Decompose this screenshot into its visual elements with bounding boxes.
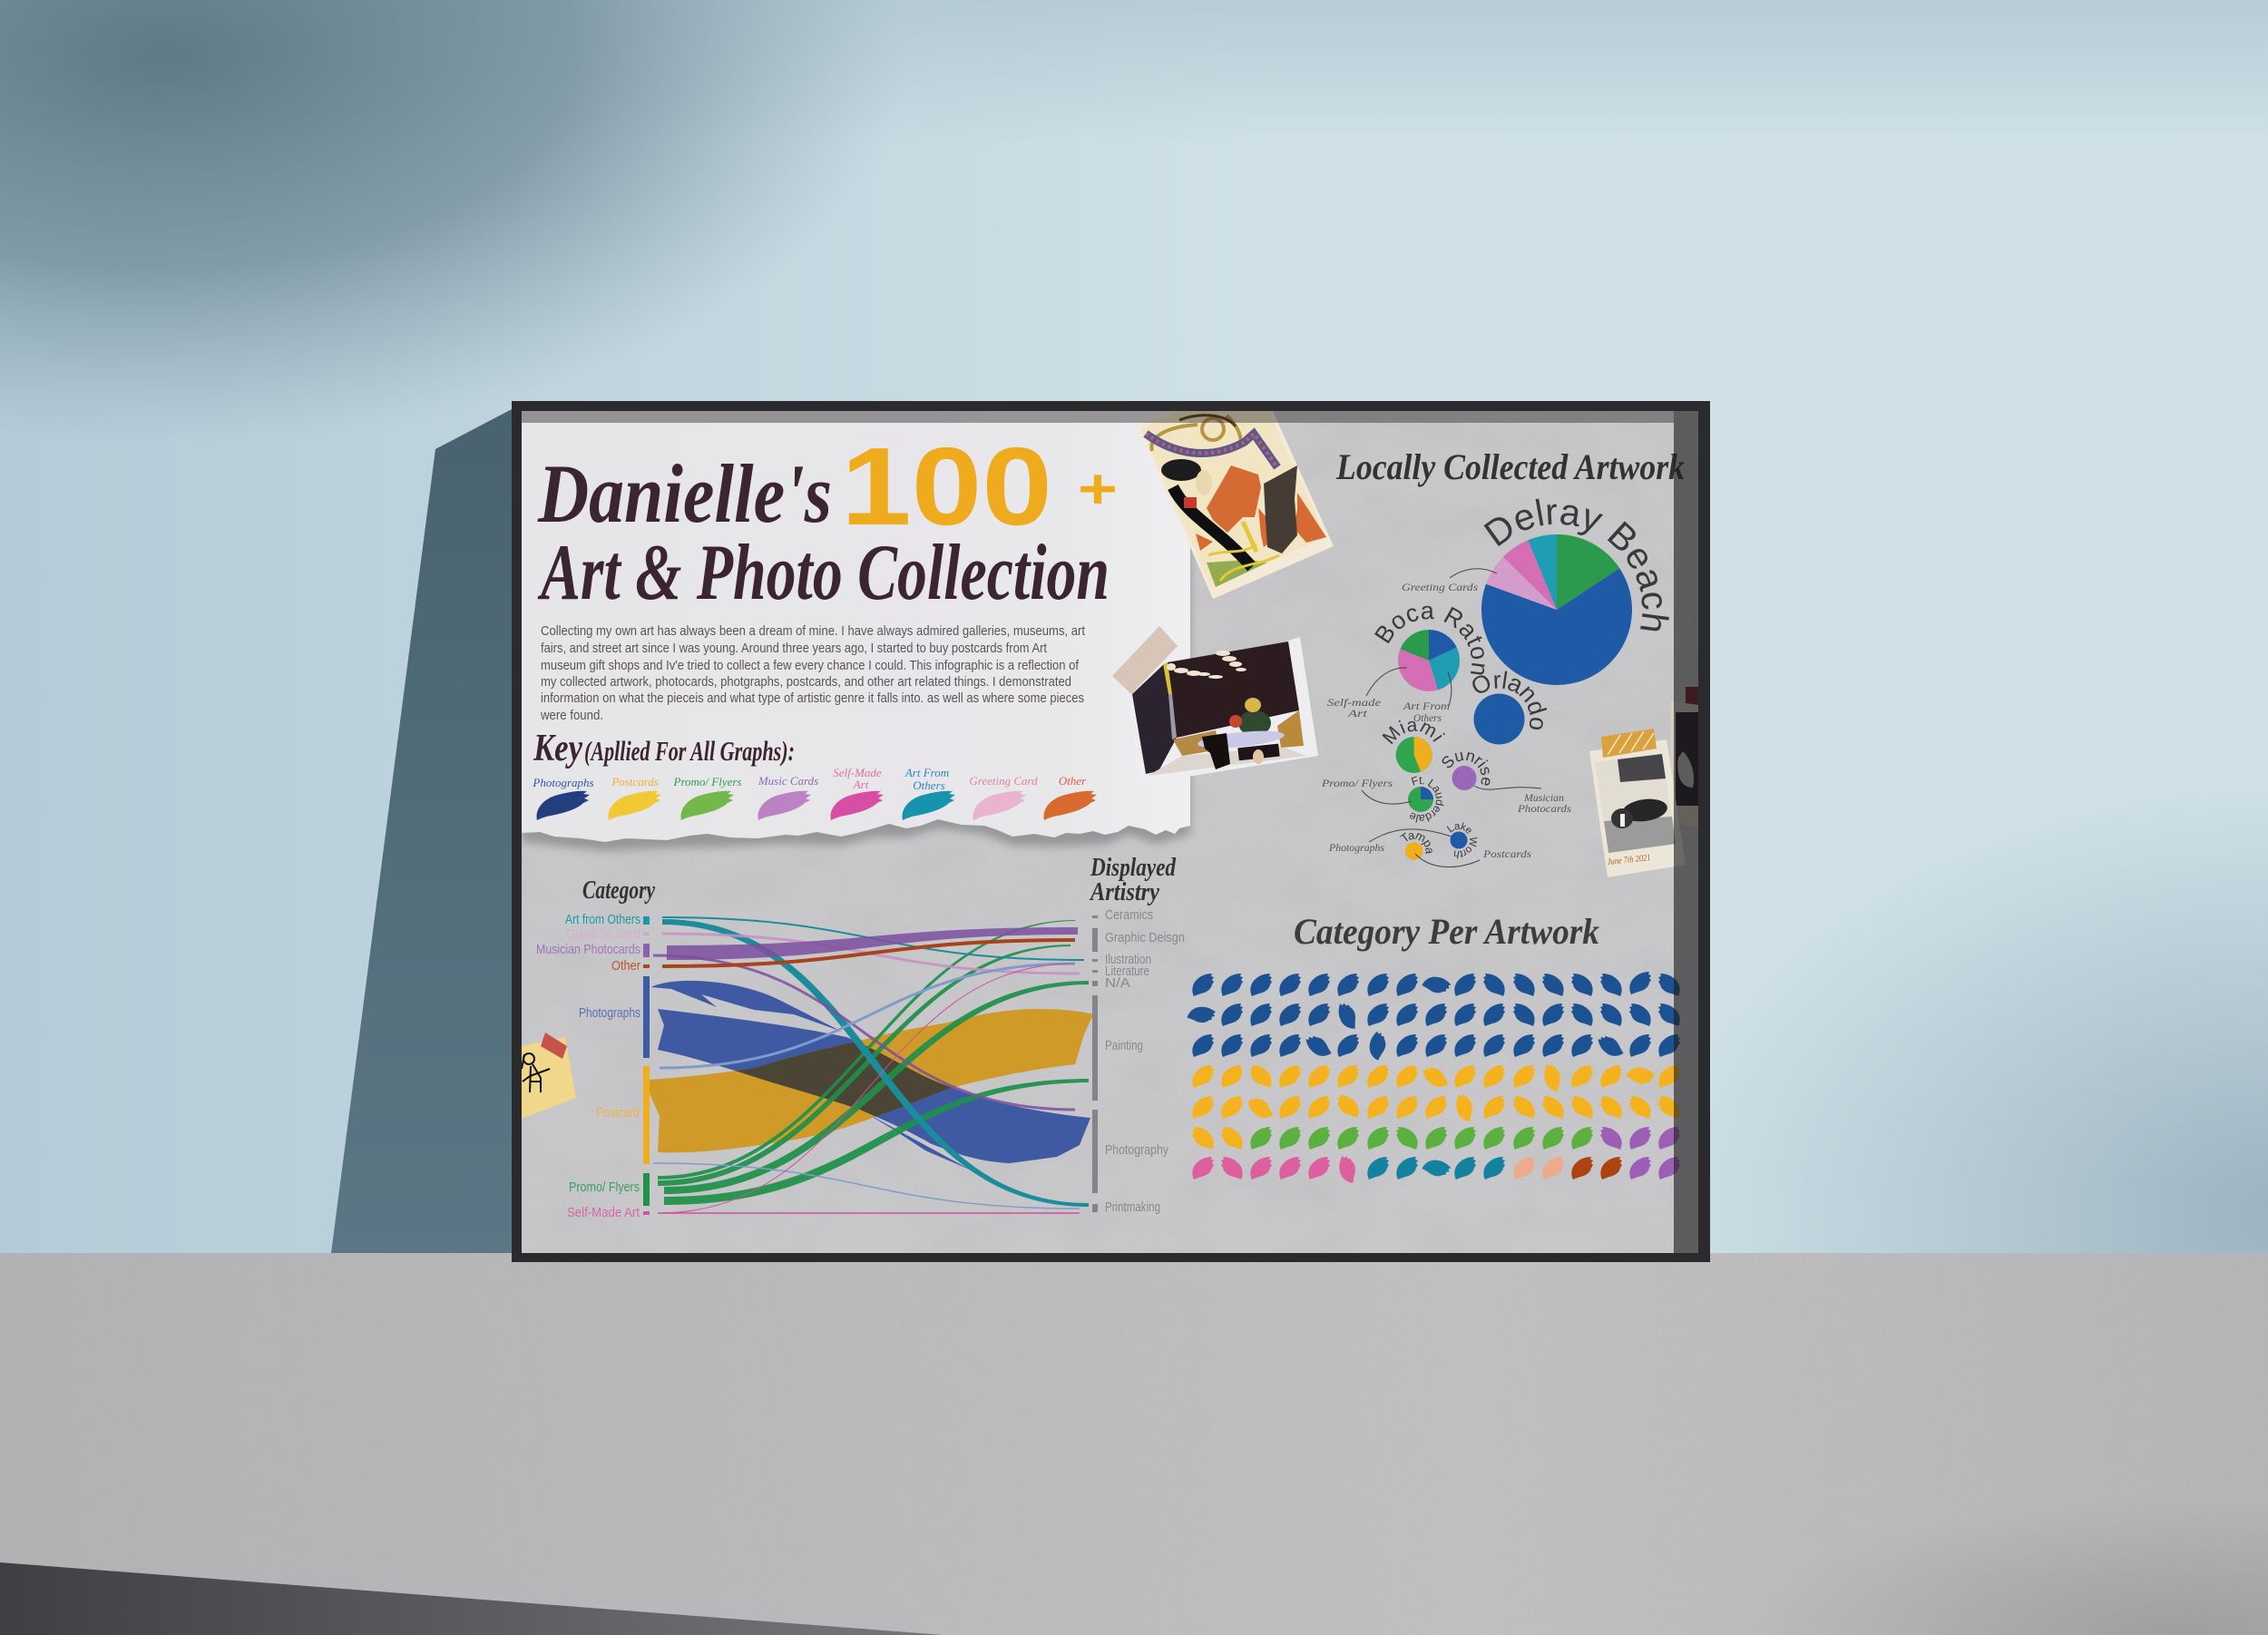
- poster paper: [522, 411, 1698, 1253]
- legend item: Promo/Flyers: Promo/ Flyers: [673, 775, 741, 788]
- legend item: Photographs: [532, 776, 594, 820]
- sankey right artistry labels: Printmaking: [1105, 1200, 1160, 1215]
- tape on automat photo: [1112, 626, 1178, 694]
- callout labels: Photocards: [1517, 802, 1571, 815]
- sankey right artistry labels: Literature: [1105, 964, 1149, 979]
- dot row 4: [1192, 1061, 1680, 1092]
- legend item: Greeting Card: [969, 774, 1038, 820]
- sankey flow: greeting card: [662, 934, 1080, 974]
- legend item: Other: Other: [1059, 774, 1087, 788]
- sankey left category labels: Greeting Card: [566, 927, 640, 942]
- pie: Boca Raton: Boca Raton: [1374, 606, 1485, 675]
- frame edges overlay: [512, 401, 1710, 1262]
- date caption: June 7th 2021: [1607, 853, 1651, 867]
- photo: behind dog photo: [1669, 687, 1699, 828]
- sankey right artistry labels: Graphic Deisgn: [1105, 931, 1185, 945]
- title line: Danielle's: Danielle's: [537, 447, 832, 540]
- sankey flow: musician to photography: [653, 955, 1075, 1110]
- pie: Tampa: Tampa: [1400, 833, 1432, 855]
- frame cast shadow: [331, 408, 513, 1253]
- callout labels: Promo/ Flyers: [1321, 777, 1393, 789]
- sankey heading: Displayed Artistry: Displayed: [1090, 854, 1177, 882]
- legend item: Music Cards: Music Cards: [758, 774, 818, 788]
- pie: Miami: Miami: [1383, 720, 1445, 744]
- legend item: Music Cards: [758, 774, 818, 820]
- legend item: Self-Made Art: Art: [853, 778, 869, 791]
- key heading: (Apllied For All Graphs):: [584, 735, 795, 767]
- sankey right artistry labels: Ilustration: [1105, 953, 1151, 967]
- torn paper shadow: [522, 411, 1190, 851]
- heading: Category Per Artwork: Category Per Artwork: [1294, 911, 1599, 952]
- poster frame: [512, 401, 1710, 1262]
- tape on dog photo: [1601, 729, 1657, 758]
- sankey heading: Category: Category: [582, 876, 655, 905]
- callout labels: Postcards: [1482, 847, 1531, 860]
- legend item: Art From Others: Others: [913, 778, 945, 792]
- sankey left category labels: Art from Others: [565, 913, 640, 927]
- intro text block: my collected artwork, photocards, photgraphs, postcards, and other art related things. I demonstrated: [541, 675, 1071, 690]
- callout leader lines: [1362, 569, 1541, 867]
- sankey flow: thin blue lines: [653, 964, 1080, 1209]
- sankey right artistry labels: Photography: [1105, 1143, 1169, 1158]
- sankey left category labels: Other: [611, 959, 640, 974]
- dot row 1: [1192, 970, 1680, 1001]
- sankey heading: Displayed Artistry: Artistry: [1089, 878, 1159, 906]
- legend item: Promo/Flyers: [673, 775, 741, 820]
- sankey flows: promo to artistry: [658, 920, 1089, 1205]
- sankey left category labels: Photographs: [579, 1006, 640, 1021]
- title plus sign: +: [1078, 458, 1118, 521]
- callout labels: Self-made: [1327, 696, 1382, 709]
- callout labels: Others: [1413, 711, 1442, 724]
- sankey left category labels: Musician Photocards: [536, 943, 640, 957]
- pie: Boca Raton: [1374, 606, 1485, 691]
- sankey left category labels: [536, 913, 640, 1220]
- legend item: Postcards: Postcards: [611, 775, 659, 788]
- pie: Sunrise: Sunrise: [1442, 751, 1490, 786]
- sankey left category labels: Self-Made Art: [567, 1206, 640, 1220]
- sankey overlap: blue over yellow: [735, 1042, 953, 1117]
- pie: Miami: [1383, 720, 1445, 773]
- dot row 2: [1186, 1000, 1680, 1031]
- key heading: Key: [533, 728, 582, 769]
- sankey left category labels: Postcard: [596, 1106, 640, 1121]
- photo: automat painting: [1131, 637, 1318, 785]
- background: wall: [0, 0, 2268, 1257]
- right shadow band: [1674, 411, 1698, 1253]
- sankey right artistry labels: Painting: [1105, 1039, 1143, 1053]
- dot row 3: [1192, 1030, 1680, 1062]
- legend item: Self-Made Art: [830, 766, 884, 820]
- intro text block: [540, 624, 1085, 723]
- background: floor: [0, 1253, 2268, 1635]
- intro text block: were found.: [540, 709, 603, 723]
- legend item: Greeting Card: Greeting Card: [969, 774, 1038, 788]
- intro text block: museum gift shops and Iv'e tried to collect a few every chance I could. This infographic is a reflection of: [541, 659, 1080, 673]
- sankey flow: photographs to photography: [651, 981, 1090, 1170]
- legend item: Postcards: [608, 775, 661, 820]
- legend item: Photographs: Photographs: [532, 776, 594, 789]
- dot row 7: [1192, 1153, 1680, 1184]
- sankey right artistry bars: [1092, 915, 1098, 1212]
- sankey flow: other: [662, 940, 1075, 966]
- callout labels: Art: [1347, 707, 1368, 720]
- pie: Sunrise: [1442, 751, 1490, 790]
- sankey right artistry labels: [1105, 908, 1185, 1215]
- legend item: Other: [1043, 774, 1097, 820]
- top shadow band: [522, 411, 1674, 423]
- pie: Orlando: Orlando: [1472, 671, 1548, 729]
- sankey left category bars: [643, 916, 650, 1215]
- pie: Tampa: [1400, 833, 1432, 860]
- intro text block: information on what the pieceis and what type of artistic genre it falls into. as well as where some pieces: [541, 691, 1084, 706]
- photo: dog polaroid: [1589, 729, 1686, 877]
- title number: 100: 100: [841, 425, 1052, 548]
- pie: Lake Worth: Lake Worth: [1446, 822, 1477, 858]
- dot row 5: [1192, 1092, 1680, 1122]
- sticky note with doodle: [522, 1033, 576, 1119]
- heading: Locally Collected Artwork: Locally Collected Artwork: [1335, 446, 1685, 487]
- sankey left category labels: Promo/ Flyers: [569, 1180, 640, 1195]
- legend item: Art From Others: [902, 766, 955, 820]
- legend item: Art From Others: Art From: [904, 766, 949, 779]
- callout labels: Greeting Cards: [1402, 581, 1478, 593]
- sankey flow: musician photocards: [667, 927, 1078, 960]
- intro text block: fairs, and street art since I was young. Around three years ago, I started to buy postcards from Art: [541, 641, 1047, 656]
- title: [537, 425, 1118, 617]
- sankey right artistry labels: N/A: [1105, 976, 1130, 991]
- sankey flow: postcard to painting: [649, 1009, 1093, 1152]
- callout labels: Photographs: [1328, 841, 1384, 854]
- legend item: Self-Made Art: Self-Made: [833, 766, 882, 779]
- callout labels: Art From: [1403, 700, 1450, 712]
- photo: illustrated postcard: [1137, 411, 1334, 599]
- pie: Ft. Lauderdale: Ft. Lauderdale: [1410, 777, 1444, 823]
- pie: Delray Beach: Delray Beach: [1484, 499, 1669, 631]
- sankey flows: self-made art: [658, 964, 1080, 1213]
- sankey flows: teal art from others: [662, 916, 1089, 1207]
- doodle figure: [522, 1053, 550, 1092]
- intro text block: Collecting my own art has always been a dream of mine. I have always admired galleries, museums, art: [541, 624, 1085, 639]
- callout labels: Musician: [1523, 791, 1564, 804]
- dot row 6: [1192, 1127, 1680, 1150]
- pie: Delray Beach: [1481, 499, 1669, 685]
- callout labels: [1321, 581, 1571, 860]
- sankey right artistry labels: Ceramics: [1105, 908, 1153, 923]
- legend: brush key: [532, 766, 1097, 820]
- sankey chart: category to displayed artistry: [536, 854, 1185, 1220]
- panel: category per artwork: [1186, 911, 1680, 1184]
- panel: locally collected artwork: [1321, 446, 1685, 867]
- sankey heading: Displayed Artistry: [1089, 854, 1177, 906]
- title line: Art & Photo Collection: Art & Photo Collection: [537, 529, 1110, 617]
- panel: torn white header paper: [522, 411, 1190, 842]
